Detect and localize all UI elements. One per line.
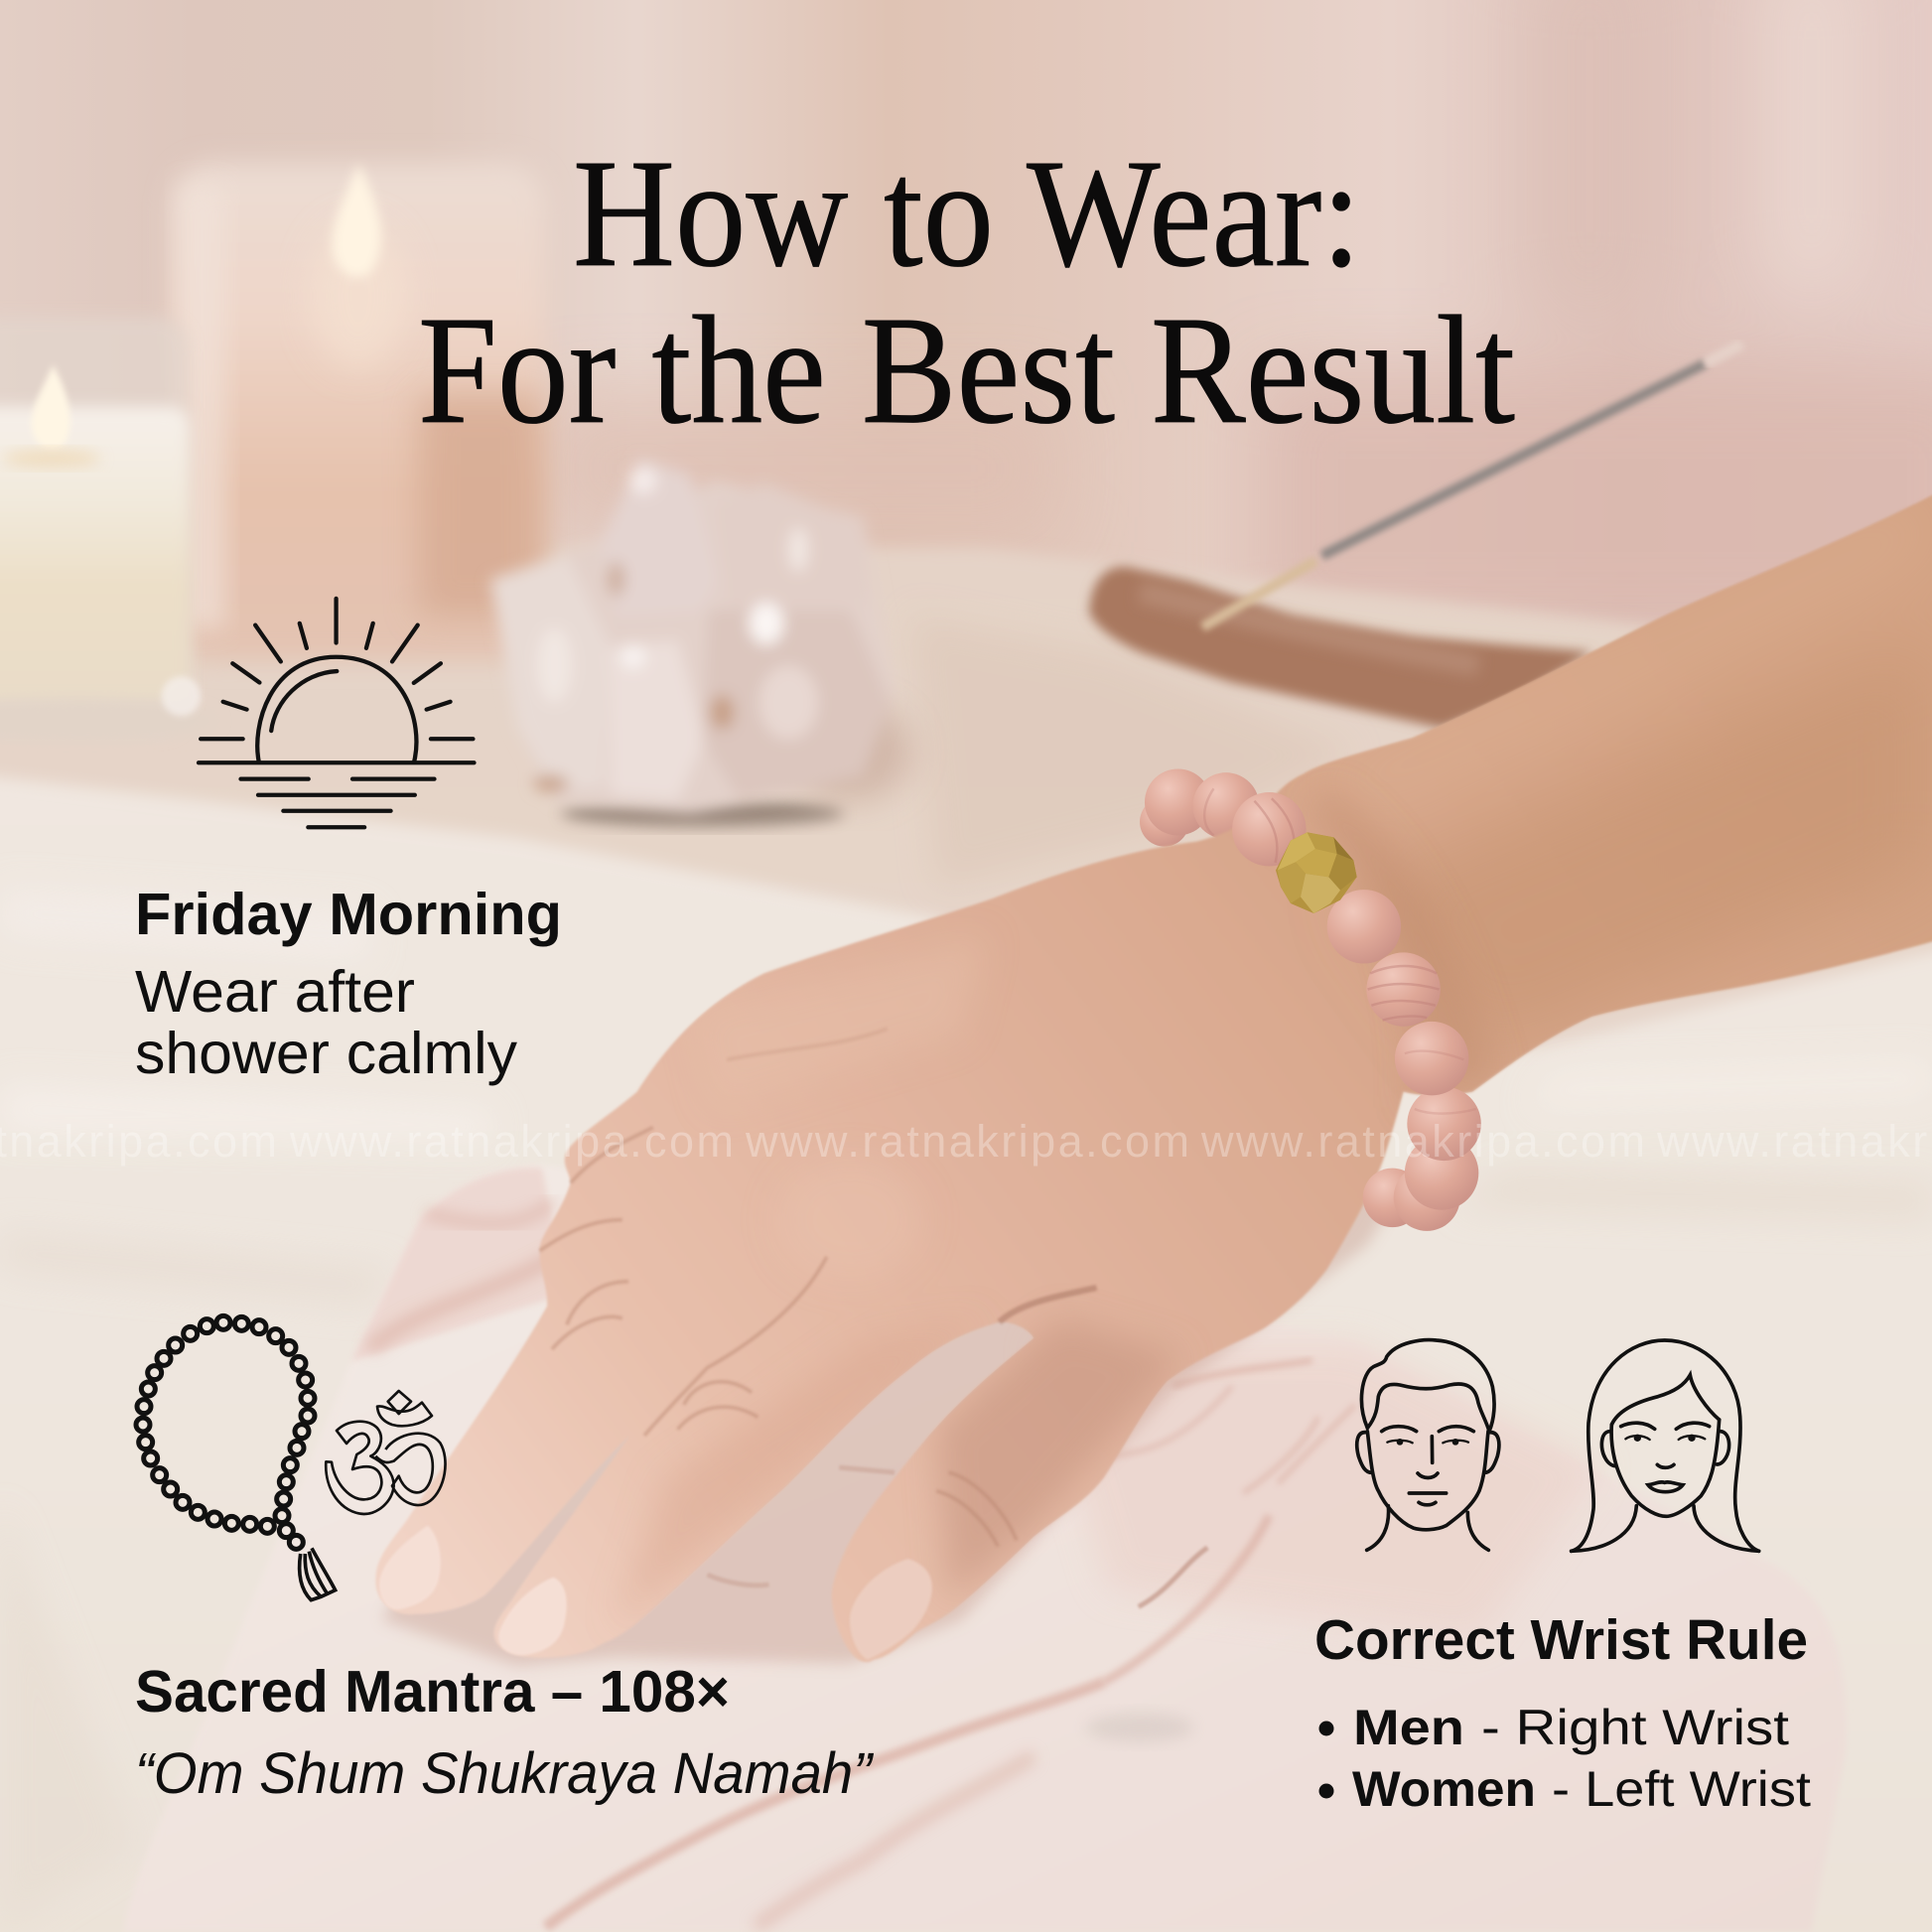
hand shadow <box>382 1182 1405 1666</box>
rule: men: Men <box>1353 1700 1464 1755</box>
gold faceted bead <box>1276 832 1357 913</box>
watermark: www.ratnakripa.com <box>745 1116 1189 1167</box>
rule: men: - Right Wrist <box>1481 1700 1789 1755</box>
linen streaks <box>0 888 1932 1932</box>
wall shading <box>542 0 1932 640</box>
finger creases <box>540 1029 1097 1547</box>
incense holder and stick <box>1089 344 1742 728</box>
title <box>418 127 1515 456</box>
mantra: “Om Shum Shukraya Namah” <box>135 1741 875 1806</box>
heading: Sacred Mantra – 108× <box>135 1659 730 1725</box>
icon: woman face <box>1572 1340 1759 1551</box>
marble grey inclusion <box>1085 1713 1194 1742</box>
large pink candle <box>172 163 546 660</box>
marble slab <box>123 1165 1846 1932</box>
wall <box>0 0 1932 690</box>
slab pink corner <box>351 1168 567 1361</box>
rule: women <box>1318 1761 1811 1817</box>
front beads of bracelet <box>1232 792 1481 1231</box>
bead banding <box>1204 788 1476 1114</box>
linen cloth <box>0 770 1932 1932</box>
marble veins <box>369 1201 1355 1927</box>
table surface <box>0 542 1932 1109</box>
rule: women: Women <box>1352 1761 1536 1817</box>
small white candle <box>0 317 215 741</box>
icon: om symbol <box>326 1391 446 1514</box>
watermark: www.ratnakripa.com <box>1200 1116 1645 1167</box>
title: For the Best Result <box>418 284 1515 456</box>
text block: Friday Morning <box>135 882 562 1086</box>
rose quartz crystal <box>490 459 911 827</box>
text block: Sacred Mantra <box>135 1659 875 1806</box>
fingernails <box>379 1525 932 1660</box>
description: shower calmly <box>135 1021 518 1086</box>
watermark <box>0 1116 1932 1167</box>
skin shading <box>627 689 1914 1603</box>
title: How to Wear: <box>573 127 1361 299</box>
back beads of bracelet <box>1140 768 1259 847</box>
icon: prayer beads <box>136 1315 336 1600</box>
icon: man face <box>1357 1340 1499 1550</box>
slab pink tint <box>1035 1343 1601 1639</box>
icon: sunrise over water <box>199 599 474 827</box>
rule: men <box>1318 1700 1789 1755</box>
hand and arm <box>375 475 1932 1662</box>
text block: Correct Wrist Rule <box>1314 1608 1811 1817</box>
description: Wear after <box>135 959 415 1025</box>
rule: women: - Left Wrist <box>1552 1761 1811 1817</box>
heading: Correct Wrist Rule <box>1314 1608 1808 1672</box>
table marble tone <box>911 617 1355 888</box>
watermark: www.ratnakripa.com <box>289 1116 734 1167</box>
heading: Friday Morning <box>135 882 562 947</box>
